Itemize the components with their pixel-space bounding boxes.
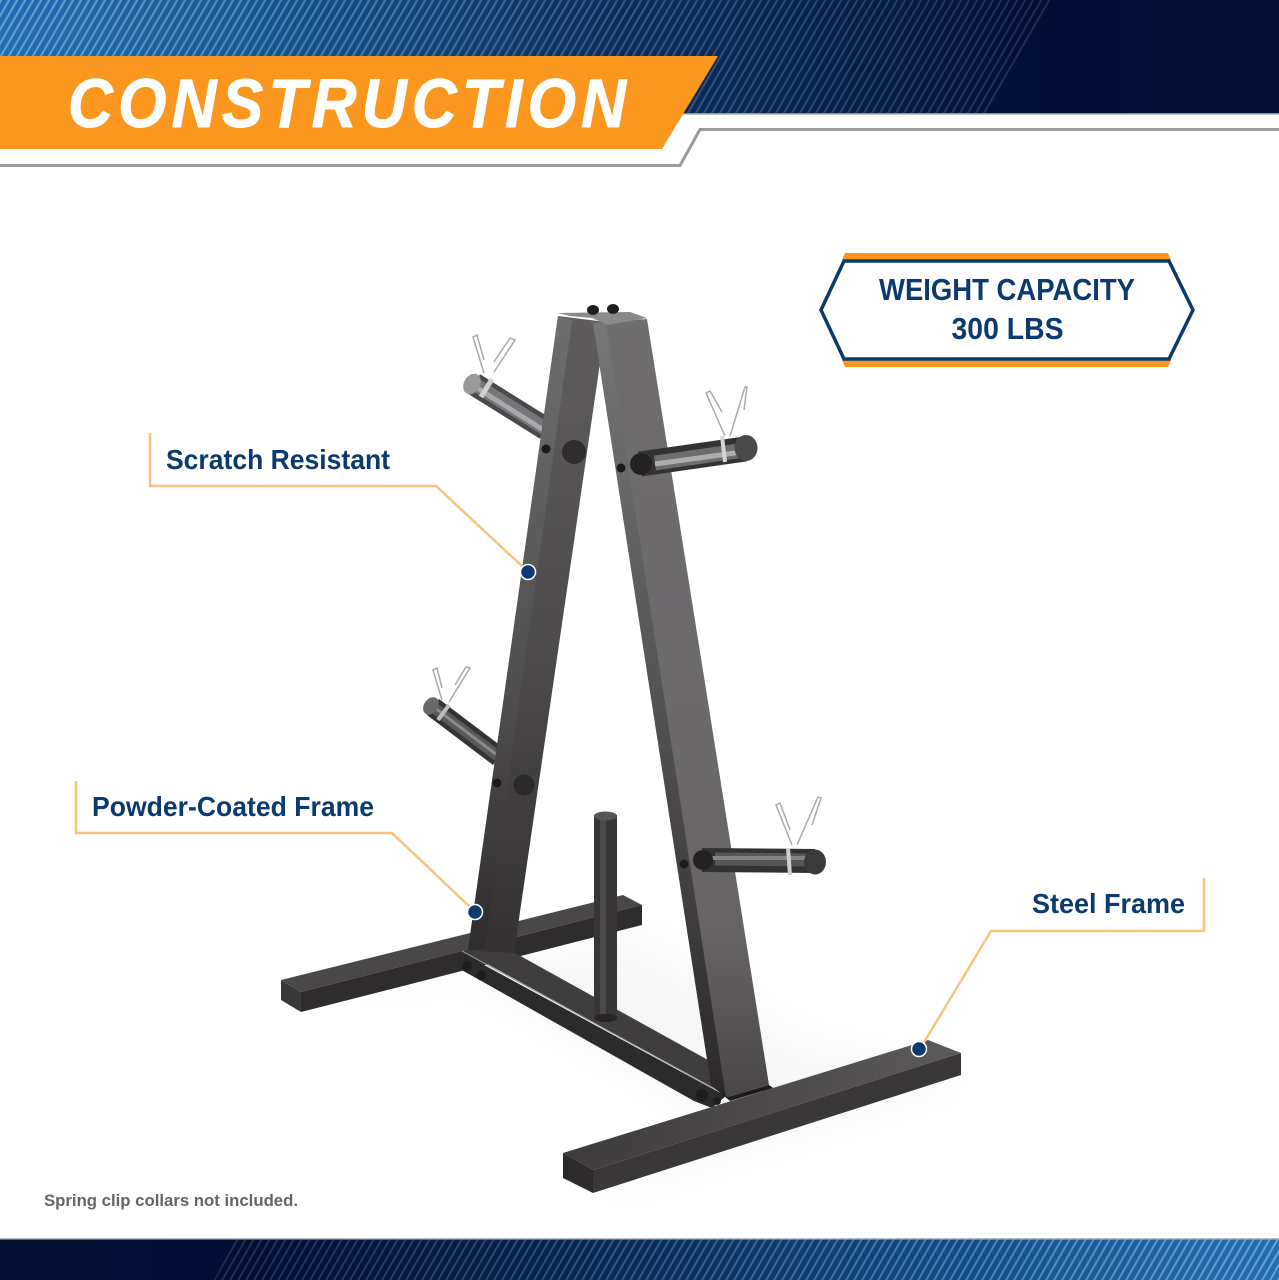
callout: scratch resistant (150, 433, 536, 580)
front base bar (563, 1040, 961, 1193)
lower right peg (693, 797, 826, 875)
knobs and bolts on legs (492, 440, 688, 868)
callout: powder-coated frame: Powder-Coated Frame (92, 791, 374, 822)
weight capacity badge (821, 253, 1193, 367)
floor shadow (300, 935, 960, 1195)
rear base bar (281, 895, 642, 1012)
callout: powder-coated frame (76, 781, 482, 920)
left leg (468, 316, 606, 953)
callout: scratch resistant: Scratch Resistant (166, 444, 390, 475)
orange title banner (0, 56, 718, 149)
title: CONSTRUCTION (68, 65, 628, 142)
footnote: Spring clip collars not included. (44, 1191, 298, 1210)
weight capacity badge: WEIGHT CAPACITY (879, 272, 1135, 307)
footer band with diagonal stripes (0, 1238, 1279, 1280)
callout: steel frame: Steel Frame (1032, 888, 1185, 919)
upper left peg (460, 335, 546, 431)
header outline stroke (0, 130, 1279, 166)
right leg (593, 319, 773, 1101)
weight plate rack (281, 304, 961, 1193)
header band with diagonal stripes (0, 0, 1279, 114)
lower left peg (420, 667, 499, 757)
upper right peg (630, 387, 758, 475)
upright plate peg (594, 812, 617, 1022)
top plate and bolts (558, 304, 647, 325)
weight capacity badge: 300 LBS (952, 311, 1064, 346)
callout: steel frame (912, 878, 1204, 1056)
cross beam (458, 950, 726, 1108)
